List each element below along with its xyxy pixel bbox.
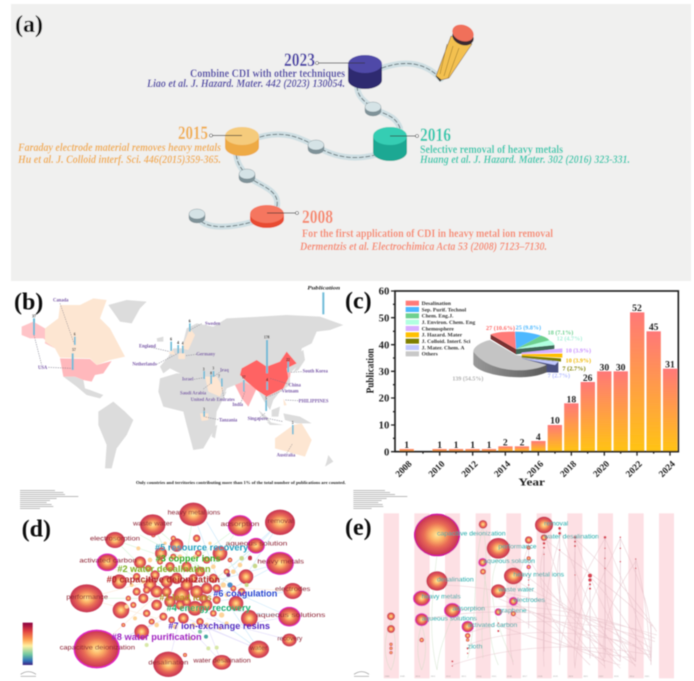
x axis labels: 2018 (559, 459, 579, 480)
bar values: 1 (454, 440, 459, 451)
year stripes (384, 513, 674, 678)
small pale nodes (125, 542, 242, 630)
publication counts: 3 (203, 367, 205, 371)
publication bars (33, 318, 294, 434)
country names: England (139, 345, 156, 350)
publication counts: 6 (74, 333, 76, 337)
leader lines (34, 303, 302, 453)
software logo (21, 672, 36, 676)
bar values: 1 (470, 440, 475, 451)
timeline road (197, 63, 441, 227)
keyword labels: adsorption (452, 606, 485, 613)
publication counts: 7 (218, 375, 220, 379)
pie legend: Sep. Purif. Technol (422, 307, 467, 313)
keyword labels: water desalination (543, 533, 599, 540)
country names (38, 299, 329, 458)
pie legend: J. Environ. Chem. Eng (422, 320, 475, 326)
y axis labels: 50 (379, 313, 389, 324)
year ticks: 2012 (446, 675, 451, 678)
year ticks: 2009 (400, 675, 405, 678)
bar values: 1 (437, 440, 442, 451)
year ticks: 2025 (645, 675, 650, 678)
publication counts: 6 (189, 319, 191, 323)
milestone 2023: Combine CDI with other techniques (190, 66, 345, 80)
keyword labels: removal (268, 518, 294, 525)
bar values: 2 (520, 437, 525, 448)
keyword labels (422, 520, 599, 651)
x axis labels: 2016 (526, 459, 546, 480)
bar values: 30 (616, 362, 626, 373)
map footnote: Only countries and territories contributing more than 1% of the total number of publications are counted. (136, 480, 346, 485)
map legend: Publication (307, 285, 340, 291)
country names: USA (38, 366, 48, 371)
cluster labels: #3 copper ions (156, 553, 221, 563)
keyword labels: adsorption (221, 521, 260, 528)
large keyword nodes (70, 503, 302, 677)
y axis labels: 20 (379, 394, 389, 405)
y axis labels (379, 287, 389, 458)
pie labels: 12 (4.7%) (557, 335, 582, 342)
small discs (189, 102, 381, 223)
highlighted countries (22, 298, 312, 457)
pie legend: J. Hazard. Mater (422, 333, 463, 339)
y axis labels: 60 (379, 287, 389, 298)
year ticks: 2022 (599, 675, 604, 678)
country names: PHILIPPINES (299, 400, 329, 405)
keyword labels: aqueous solution (226, 541, 288, 548)
milestone 2016: 2016 (420, 125, 451, 146)
pie legend: Others (422, 352, 438, 358)
yearly bars (399, 312, 677, 452)
year ticks: 2015 (492, 675, 497, 678)
pie labels: 18 (7.1%) (548, 330, 573, 337)
x axis labels: 2008 (394, 459, 415, 480)
keyword labels: electrodes (513, 597, 546, 604)
bar values: 26 (583, 373, 593, 384)
cluster labels: #1 lead ions (159, 593, 212, 603)
panel d: keyword cluster network (20, 490, 326, 677)
keyword labels: electrodes (275, 586, 311, 593)
software logo (354, 672, 369, 676)
publication counts: 4 (177, 341, 179, 345)
publication counts: 8 (210, 371, 212, 375)
year ticks: 2018 (538, 675, 543, 678)
milestone 2016 (373, 125, 630, 166)
country names: Netherlands (132, 362, 157, 367)
year ticks: 2016 (507, 675, 512, 678)
year ticks: 2008 (385, 675, 390, 678)
year ticks: 2017 (522, 675, 528, 678)
small green and blue nodes (145, 556, 257, 650)
citation arcs (385, 525, 657, 670)
milestone 2023: Liao et al. J. Hazard. Mater. 442 (2023) 130054. (146, 76, 345, 90)
panel a label: (a) (15, 12, 43, 38)
publication counts: 178 (264, 336, 270, 340)
cluster labels: #8 water purification (112, 632, 202, 642)
keyword labels: heavy metal ions (513, 571, 565, 578)
network links (87, 514, 293, 664)
bar values: 31 (665, 360, 675, 371)
country names: Saudi Arabia (180, 392, 207, 397)
keyword labels: waste water (497, 586, 535, 593)
timeline nodes (387, 514, 553, 654)
country names: Tanzania (219, 418, 238, 423)
bar values: 10 (550, 416, 560, 427)
milestone 2015: Faraday electrode material removes heavy metals (17, 140, 221, 154)
bar values: 52 (632, 303, 642, 314)
pie labels: 7 (2.7%) (548, 373, 570, 380)
y axis labels: 10 (379, 421, 389, 432)
keyword labels: desalination (148, 660, 189, 667)
pie legend: Chemosphere (422, 326, 454, 332)
keyword labels: capacitive deionization (437, 531, 506, 538)
pie labels: 7 (2.7%) (562, 366, 586, 373)
milestone 2008: Dermentzis et al. Electrochimica Acta 53 (2008) 7123–7130. (299, 239, 547, 253)
cluster labels: #6 coagulation (213, 588, 277, 598)
publication counts: 57 (72, 348, 76, 352)
keyword labels: performance (66, 594, 108, 601)
country names: Canada (53, 299, 69, 304)
panel b: world map (14, 285, 346, 485)
grey landmasses (63, 300, 343, 468)
cluster labels (107, 543, 277, 642)
keyword labels: desalination (437, 576, 474, 583)
keyword labels: zloth (468, 644, 483, 651)
milestone 2023 (146, 50, 382, 90)
keyword labels: waste water (132, 521, 173, 528)
keyword labels: electrosorption (90, 535, 140, 542)
publication counts: 4 (266, 378, 268, 382)
keyword labels: recovery (277, 636, 303, 643)
publication counts: 22 (286, 358, 290, 362)
pie labels: 10 (3.9%) (566, 358, 591, 365)
keyword labels: aqueous solutions (422, 615, 478, 622)
x axis labels: 2020 (592, 459, 612, 480)
cluster labels: #4 energy recovery (167, 603, 251, 613)
year ticks: 2024 (629, 675, 635, 678)
map legend (307, 285, 340, 314)
country names: Singapore (248, 417, 268, 422)
milestone 2008: 2008 (302, 207, 333, 228)
panel e label: (e) (345, 515, 372, 541)
country names: United Arab Emirates (191, 398, 235, 403)
country names: Israel (182, 378, 194, 383)
x axis labels: 2022 (624, 459, 645, 480)
panel b label: (b) (14, 290, 43, 316)
year ticks: 2021 (583, 675, 589, 678)
year ticks: 2014 (477, 675, 482, 678)
keyword labels: activated carbon (79, 558, 137, 565)
pie legend: Chem. Eng.J. (422, 314, 454, 320)
milestone 2015: 2015 (178, 123, 208, 144)
x axis labels (394, 459, 678, 480)
icon: pencil (436, 22, 476, 81)
pie legend (406, 301, 475, 358)
country names: Vietnam (282, 389, 299, 394)
publication counts: 6 (170, 337, 172, 341)
country names: Germany (196, 353, 216, 358)
keyword labels: heavy metal ions (168, 510, 221, 517)
network nodes (112, 533, 258, 657)
year ticks: 2011 (431, 675, 436, 678)
country names: India (232, 403, 244, 408)
year ticks: 2023 (614, 675, 619, 678)
y axis labels: 40 (379, 340, 389, 351)
keyword labels: heavy metals (257, 559, 305, 566)
colour scale (23, 623, 33, 665)
x axis labels: 2012 (460, 459, 481, 480)
publication counts: 3 (212, 367, 214, 371)
cluster labels: #5 resource recovery (155, 543, 248, 553)
cluster labels: #2 water desalination (117, 564, 211, 574)
pie legend: Desalination (422, 301, 451, 307)
publication counts (32, 315, 294, 425)
publication counts: 5 (265, 396, 267, 400)
bar values (404, 303, 675, 451)
publication counts: 17 (242, 375, 246, 379)
bar values: 45 (649, 322, 659, 333)
x axis labels: 2024 (657, 459, 678, 480)
panel c: bar chart (345, 287, 678, 488)
year ticks: 2013 (461, 675, 467, 678)
keyword labels: graphene (498, 607, 527, 614)
bar values: 1 (404, 440, 409, 451)
publication counts: 3 (203, 407, 205, 411)
keyword labels: aqueous solution (483, 558, 535, 565)
country names: China (289, 384, 301, 389)
small timeline dots (451, 527, 636, 667)
bar values: 2 (503, 437, 508, 448)
bar values: 30 (600, 362, 609, 373)
panel a: timeline (11, 4, 691, 281)
keyword labels: capacitive deionization (60, 645, 135, 652)
keyword labels: heavy metals (422, 594, 461, 601)
keyword labels: activated carbon (468, 622, 518, 629)
country names: Sweden (205, 322, 221, 327)
pie labels: 139 (54.5%) (452, 376, 483, 383)
y axis title: Publication (365, 348, 377, 393)
pie legend: J. Mater. Chem. A (422, 345, 464, 351)
keyword labels: water (249, 645, 268, 652)
pie labels: 27 (10.6%) (486, 325, 515, 332)
keyword labels: performance (498, 544, 537, 551)
cluster labels: #0 capacitive deionization (107, 575, 220, 585)
keyword labels: water desalination (192, 658, 251, 665)
milestone 2015 (17, 123, 259, 166)
keyword labels (60, 510, 326, 667)
keyword labels: aqueous solutions (256, 612, 326, 619)
y axis labels: 0 (384, 447, 389, 458)
panel c label: (c) (345, 288, 372, 314)
x axis labels: 2010 (427, 459, 448, 480)
software header text (20, 490, 78, 509)
milestone 2015: Hu et al. J. Colloid interf. Sci. 446(2015)359-365. (17, 152, 221, 166)
milestone 2016: Selective removal of heavy metals (420, 142, 563, 156)
country names: South Korea (303, 370, 328, 375)
year ticks: 2010 (415, 675, 421, 678)
year ticks: 2020 (568, 675, 574, 678)
3d pie chart (473, 332, 562, 377)
pie labels (452, 324, 591, 383)
pie labels: 25 (9.8%) (516, 324, 541, 331)
country names: Australia (277, 453, 296, 458)
milestone 2008: For the first application of CDI in heavy metal ion removal (302, 226, 554, 240)
milestone 2023: 2023 (284, 50, 315, 71)
x axis title: Year (518, 476, 545, 488)
bar values: 4 (536, 432, 541, 443)
publication counts: 37 (32, 315, 36, 319)
milestone 2008 (250, 205, 554, 253)
keyword labels: removal (544, 520, 569, 527)
country names: Iraq (220, 368, 229, 373)
publication counts: 4 (182, 342, 184, 346)
pie legend: J. Colloid. Interf. Sci (422, 339, 471, 345)
bar values: 1 (487, 440, 492, 451)
year ticks (385, 675, 650, 678)
y axis labels: 30 (379, 367, 389, 378)
bar values: 18 (567, 394, 576, 405)
publication counts: 5 (292, 421, 294, 425)
panel d label: (d) (22, 517, 51, 543)
x axis labels: 2014 (493, 459, 513, 480)
pie labels: 10 (3.9%) (566, 347, 591, 354)
year ticks: 2019 (553, 675, 558, 678)
panel e: keyword timeline (345, 490, 674, 678)
milestone 2016: Huang et al. J. Hazard. Mater. 302 (2016) 323-331. (419, 152, 630, 166)
cluster labels: #7 ion-exchange resins (168, 621, 270, 631)
software header text (353, 490, 407, 509)
axes frame (391, 291, 678, 456)
